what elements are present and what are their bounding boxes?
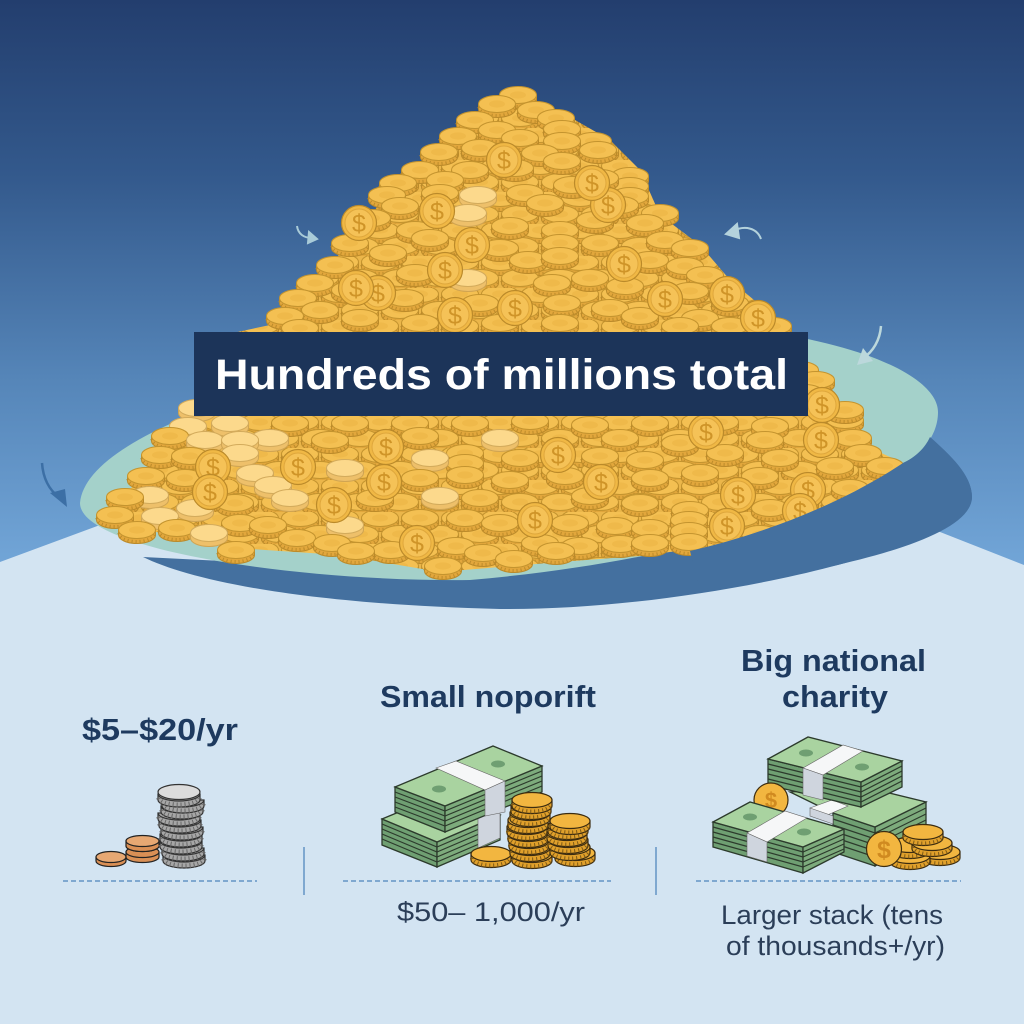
coins: upright dollar faces: $: [430, 198, 444, 226]
coins: upright dollar faces: $: [601, 192, 615, 220]
column 3 heading: charity: [782, 679, 889, 714]
coins: upright dollar faces: $: [801, 477, 815, 505]
divider: [343, 880, 611, 882]
coins: upper pile: [266, 86, 792, 342]
icon: large cash stacks and coins: $: [765, 788, 777, 813]
coins: upright dollar faces: $: [793, 498, 807, 526]
plate shadow: [143, 437, 972, 609]
background gradient: [0, 0, 1024, 580]
coins: upright dollar faces: $: [751, 305, 765, 333]
coins: upright dollar faces: $: [814, 427, 828, 455]
coins: upright dollar faces: $: [465, 232, 479, 260]
divider: [63, 880, 257, 882]
coins: upright dollar faces: $: [291, 454, 305, 482]
column 3 caption: [721, 900, 945, 961]
coins: upright dollar faces: $: [528, 507, 542, 535]
coins: upright dollar faces: $: [352, 210, 366, 238]
column 3 heading: [741, 643, 926, 714]
coins: upright dollar faces: $: [731, 482, 745, 510]
icon: cash bundles and coins: [382, 746, 595, 868]
column 3 heading: Big national: [741, 643, 926, 678]
coins: upright dollar faces: $: [379, 434, 393, 462]
plate edge overlap: [690, 437, 972, 590]
coins: upright dollar faces: $: [377, 469, 391, 497]
coins: upright dollar faces: $: [658, 286, 672, 314]
coin pile: [96, 86, 904, 580]
column 3 caption: of thousands+/yr): [726, 931, 945, 961]
banner title: Hundreds of millions total: [215, 351, 788, 399]
coins: upright dollar faces: $: [349, 275, 363, 303]
coins: upright dollar faces: $: [594, 469, 608, 497]
coins: upright dollar faces: $: [699, 419, 713, 447]
coins: upright dollar faces: $: [438, 257, 452, 285]
coins: upright dollar faces: $: [327, 492, 341, 520]
coins: upright dollar faces: $: [585, 170, 599, 198]
arrow: left of plate: [42, 463, 67, 507]
coins: upright dollar faces: $: [448, 302, 462, 330]
banner: [194, 332, 808, 416]
coins: upright dollar faces: $: [203, 479, 217, 507]
coins: upright dollar faces: $: [508, 295, 522, 323]
column 2 caption: $50– 1,000/yr: [397, 897, 585, 927]
column 3 caption: Larger stack (tens: [721, 900, 943, 930]
icon: large cash stacks and coins: $: [877, 836, 891, 864]
divider: [696, 880, 961, 882]
coins: lower pile: [96, 362, 904, 580]
icon: large cash stacks and coins: [713, 737, 960, 873]
coins: upright dollar faces: $: [815, 392, 829, 420]
coins: upright dollar faces: $: [551, 442, 565, 470]
arrow: upper right: [726, 224, 761, 239]
column 2 heading: Small noporift: [380, 679, 596, 714]
coins: upright dollar faces: $: [720, 513, 734, 541]
coins: upright dollar faces: $: [617, 251, 631, 279]
coins: upright dollar faces: $: [371, 280, 385, 308]
arrow: right of plate: [857, 326, 881, 365]
coins: upright dollar faces: $: [206, 454, 220, 482]
coins: upright dollar faces: $: [497, 147, 511, 175]
coins: upright dollar faces: [192, 142, 840, 560]
arrow: upper left: [297, 226, 317, 243]
coins: upright dollar faces: $: [410, 530, 424, 558]
plate: [80, 325, 938, 580]
icon: small coin stacks: [96, 784, 205, 868]
lower light panel: [0, 500, 1024, 1024]
coins: upright dollar faces: $: [720, 281, 734, 309]
column 1 heading: $5–$20/yr: [82, 712, 238, 747]
